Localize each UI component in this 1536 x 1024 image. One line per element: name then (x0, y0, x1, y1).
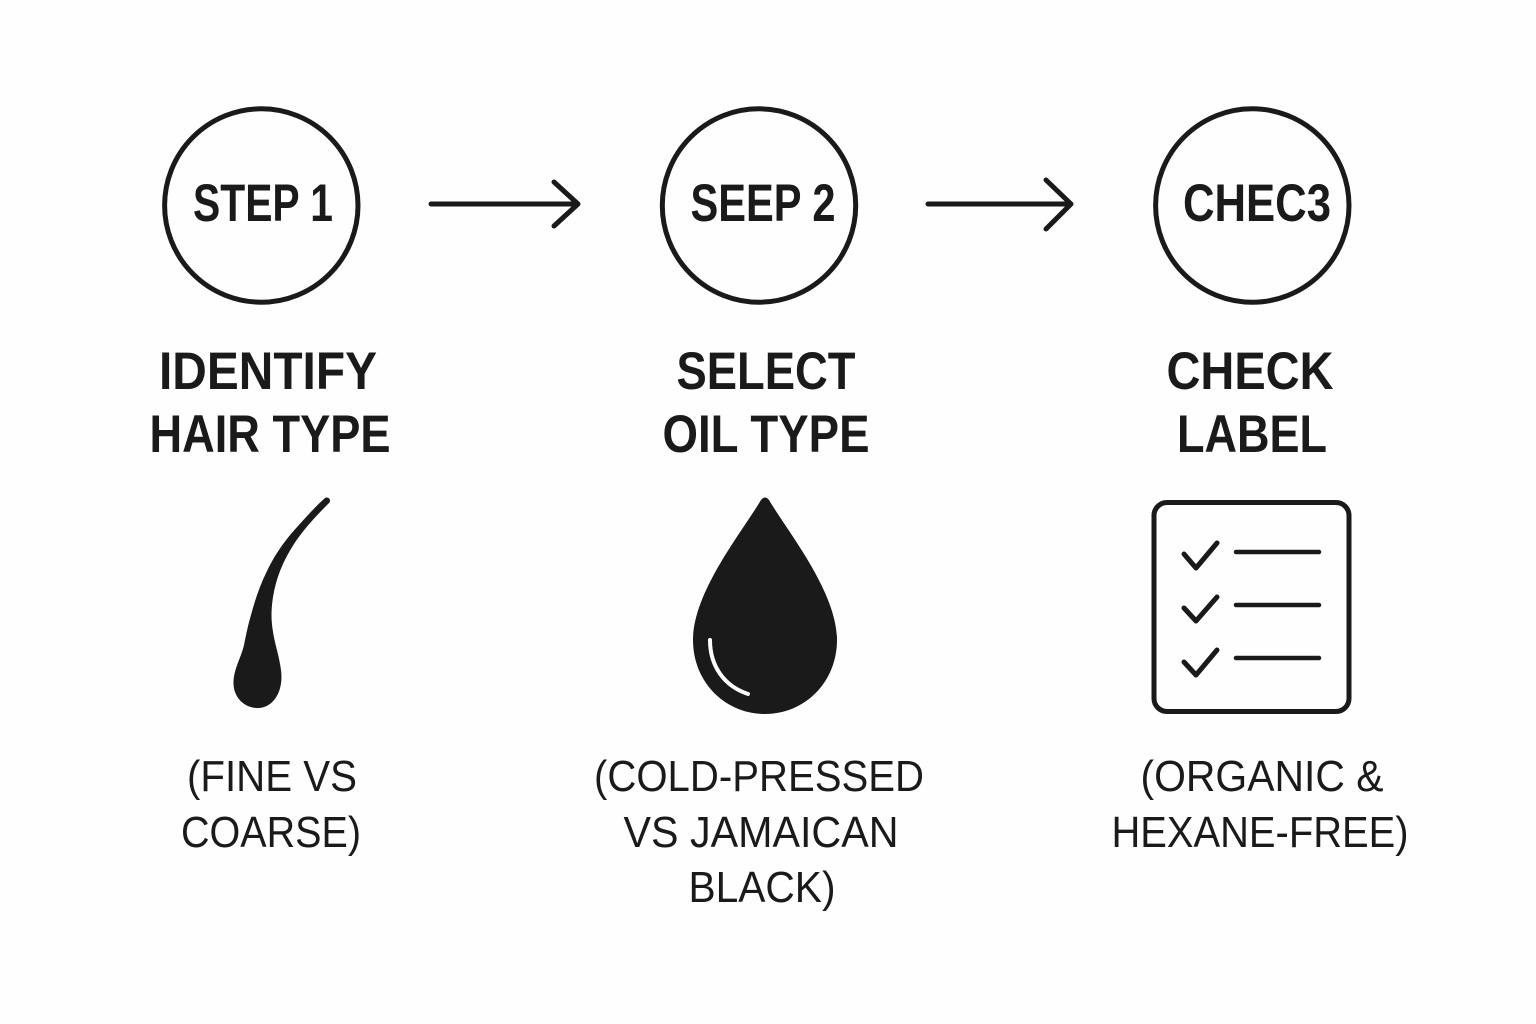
step 2 badge: SEEP 2 (690, 174, 836, 233)
step 1 description (181, 753, 361, 857)
step 1 badge (165, 109, 358, 302)
step 2 description: (COLD-PRESSED (594, 753, 924, 801)
step 2 description: VS JAMAICAN (624, 809, 898, 857)
step 1 heading (150, 342, 390, 464)
step 3 badge (1156, 109, 1349, 302)
icon: hair strand (233, 497, 330, 708)
step 3 description: HEXANE-FREE) (1112, 809, 1408, 857)
step 3 heading (1166, 342, 1334, 464)
step 2 column (594, 109, 924, 912)
step 2 heading (662, 342, 870, 464)
step 3 heading: CHECK (1166, 342, 1334, 401)
step 1 badge: STEP 1 (193, 174, 333, 233)
step 1 heading: HAIR TYPE (150, 405, 390, 464)
step 1 column (150, 109, 390, 857)
step 1 description: (FINE VS (187, 753, 357, 801)
step 3 badge: CHEC3 (1183, 174, 1331, 233)
step 3 description: (ORGANIC & (1140, 753, 1384, 801)
step 1 heading: IDENTIFY (159, 342, 377, 401)
step 2 heading: SELECT (676, 342, 856, 401)
step 3 heading: LABEL (1177, 405, 1327, 464)
icon: checklist (1154, 502, 1349, 712)
arrow: step 2 to step 3 (928, 180, 1071, 229)
step 3 column (1112, 109, 1408, 857)
step 2 description (594, 753, 924, 912)
step 2 heading: OIL TYPE (662, 405, 870, 464)
step 1 description: COARSE) (181, 809, 361, 857)
step 2 description: BLACK) (688, 864, 836, 912)
icon: oil drop (693, 498, 837, 714)
step 2 badge (662, 109, 856, 302)
arrow: step 1 to step 2 (431, 182, 578, 226)
step 3 description (1112, 753, 1408, 857)
